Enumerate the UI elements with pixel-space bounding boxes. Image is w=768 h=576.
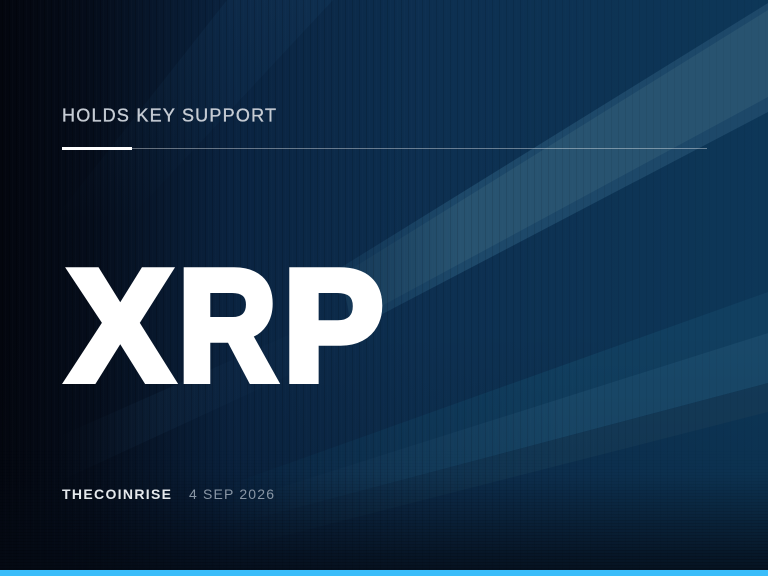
light rays: lower bands — [304, 294, 768, 498]
title: XRP: P — [283, 237, 384, 414]
light rays: upper left — [30, 0, 333, 250]
title: XRP: R — [178, 238, 277, 414]
title: XRP — [68, 237, 384, 414]
kicker: holds key support: HOLDS KEY SUPPORT — [62, 106, 276, 126]
light ray: faint band beneath title — [60, 330, 300, 481]
bottom accent bar — [0, 570, 768, 576]
title: XRP: X — [68, 238, 172, 414]
byline: source: THECOINRISE — [62, 486, 171, 502]
divider rule with accent — [62, 147, 707, 150]
byline: date: 4 SEP 2026 — [189, 486, 274, 502]
light ray: large upper band — [340, 3, 768, 330]
